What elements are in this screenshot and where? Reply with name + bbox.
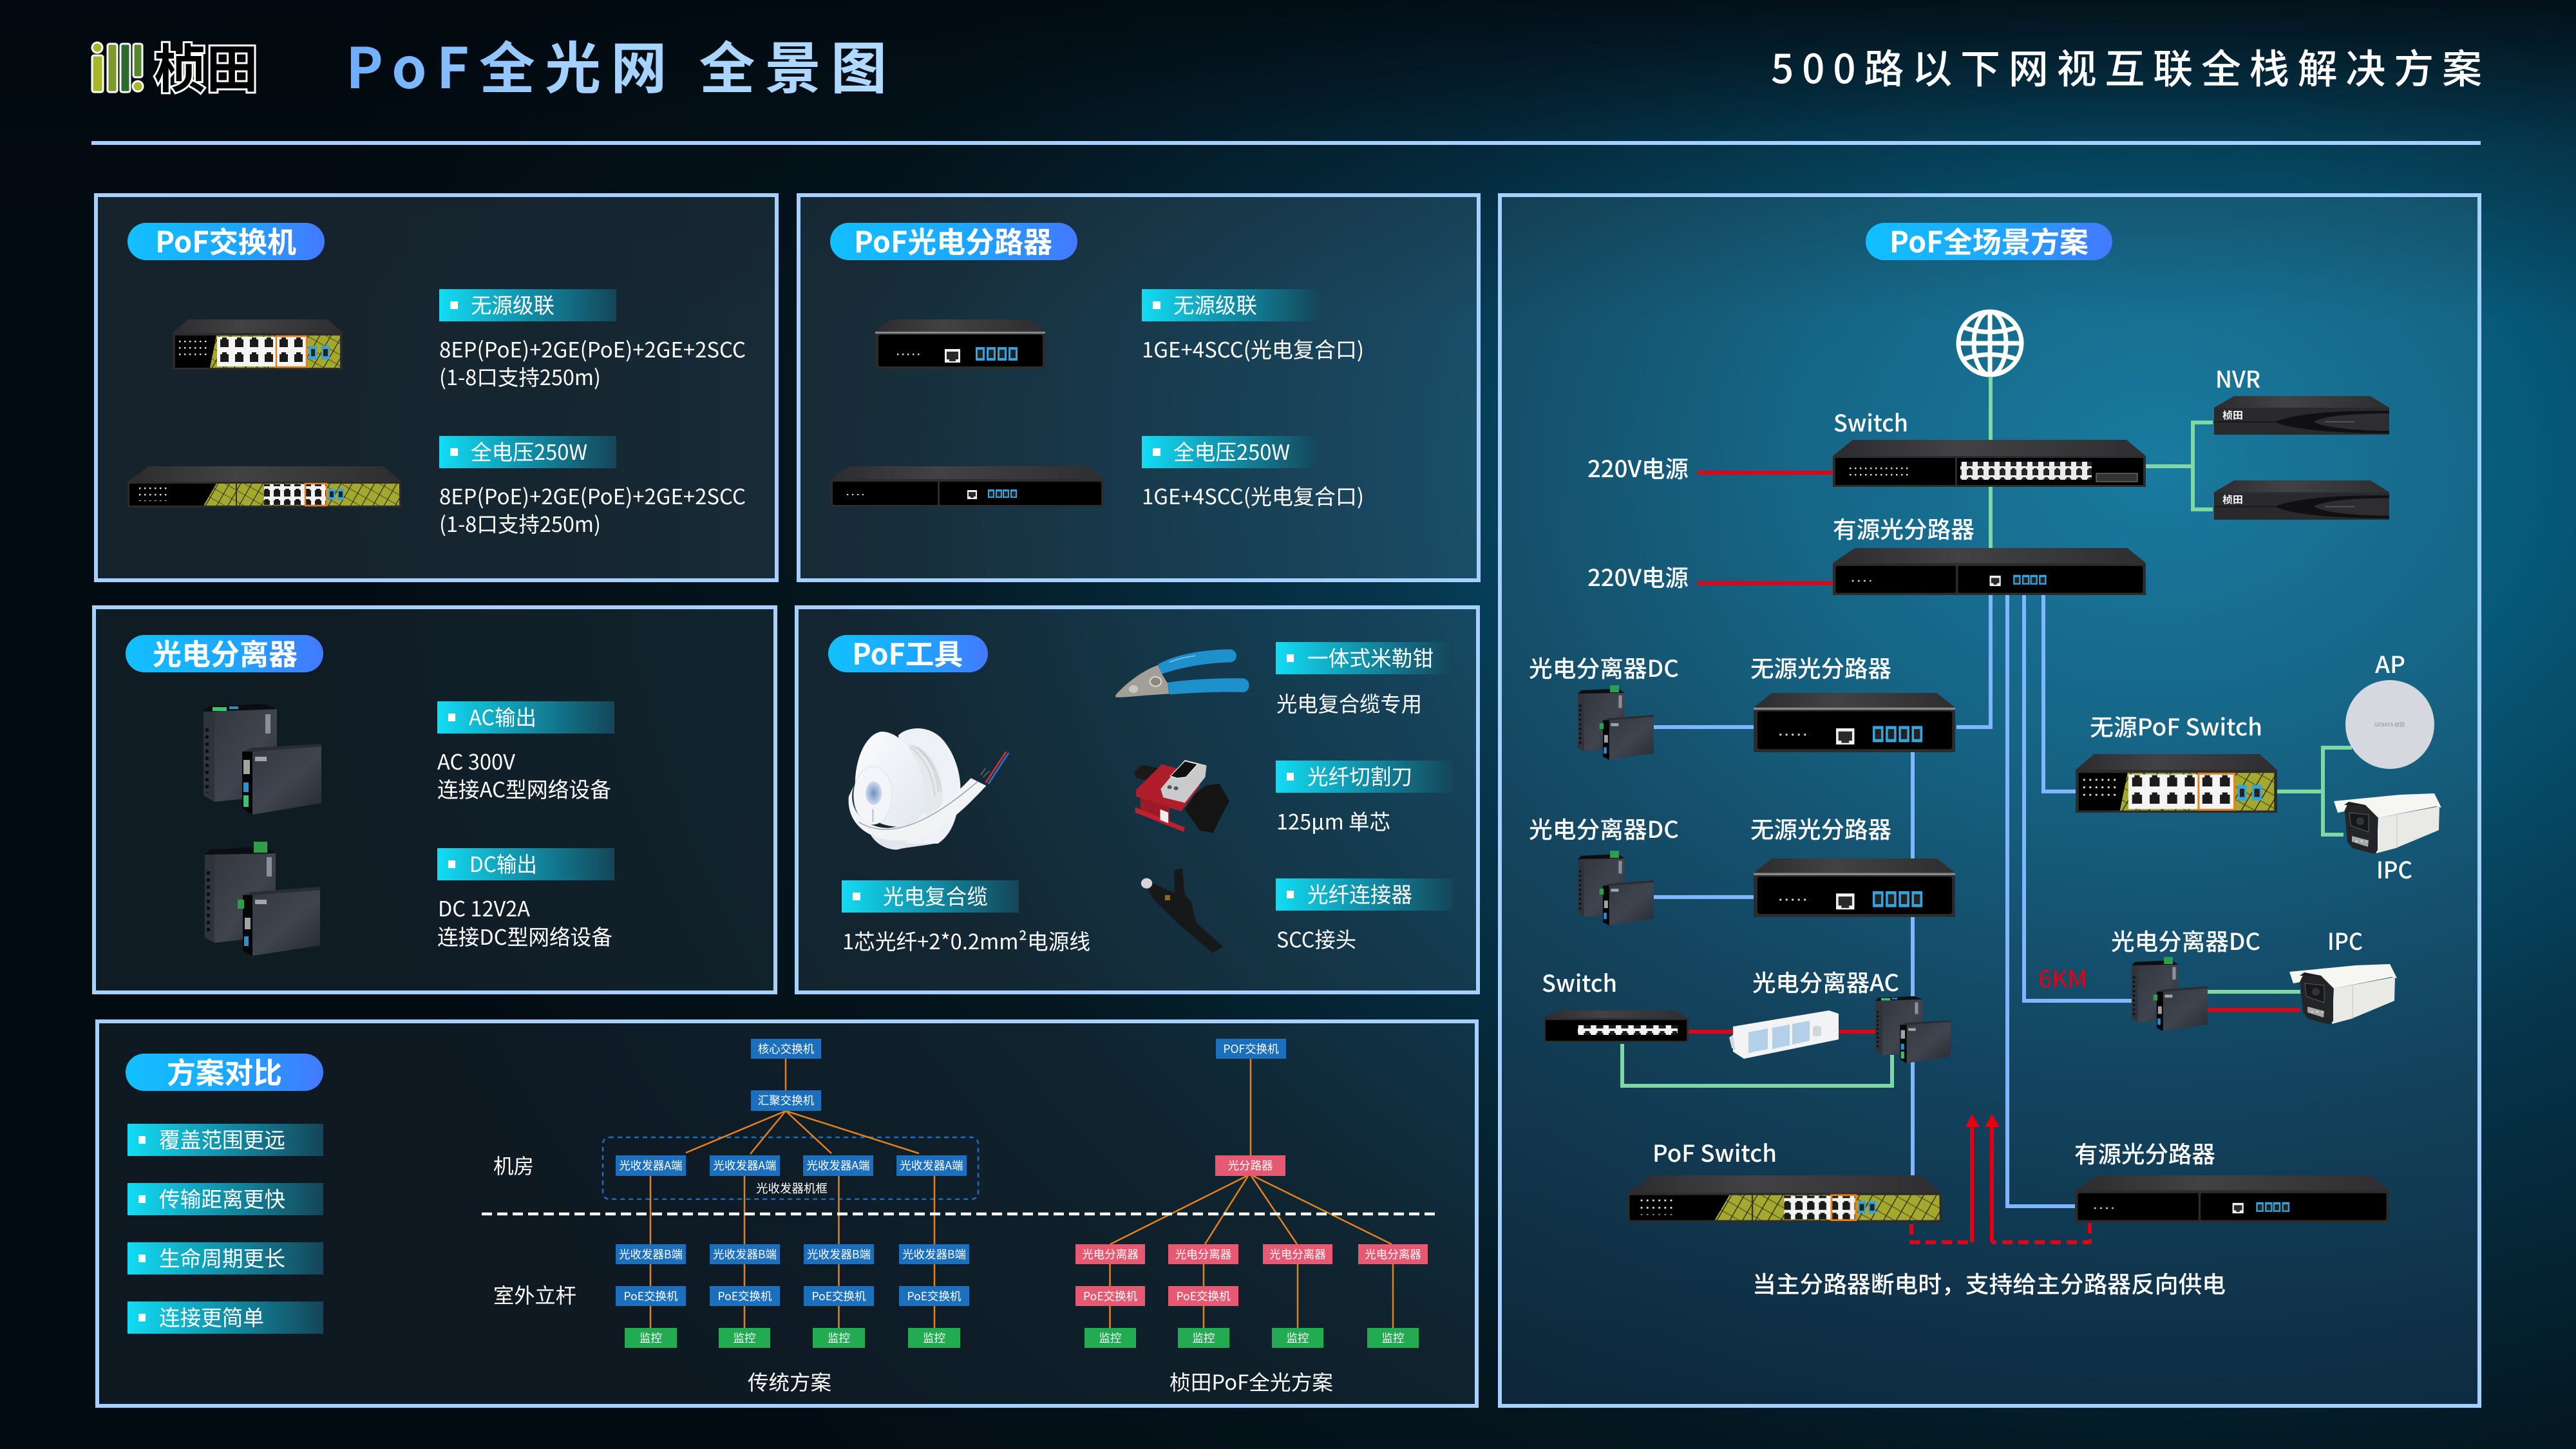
tag: 光电复合缆 (842, 880, 1019, 913)
row: separators (1075, 1244, 1428, 1264)
tag: 一体式米勒钳 (1276, 641, 1453, 674)
row: monitors (1084, 1328, 1419, 1348)
green data link (1622, 1044, 1892, 1086)
label: Switch: Switch (1833, 405, 1908, 439)
box: 核心交换机: 核心交换机 (758, 1041, 815, 1057)
logo: Zhentian: 桢田 (154, 28, 258, 103)
box: 核心交换机 (751, 1039, 821, 1059)
label: 无源PoF Switch: 无源PoF Switch (2090, 709, 2262, 743)
logo: Zhentian (92, 28, 258, 103)
device: DC separator (2132, 957, 2208, 1031)
spec text: SCC接头 (1276, 923, 1356, 954)
box: 光分路器 (1215, 1155, 1285, 1176)
device: passive PoF switch (2076, 754, 2277, 813)
red power link (2208, 1008, 2300, 1012)
row: transceiver B (616, 1244, 969, 1264)
label: 光收发器机框: 光收发器机框 (756, 1180, 828, 1197)
panel: solution comparison (97, 1021, 1477, 1406)
tag: 光纤切割刀: 光纤切割刀 (1307, 760, 1412, 791)
device: main active splitter (1833, 548, 2146, 595)
row: monitors: 监控 (1382, 1330, 1404, 1346)
device: DC separator (1578, 685, 1654, 760)
header rule (91, 141, 2481, 145)
device: short PoF switch (173, 319, 343, 370)
tag: 光纤切割刀 (1276, 760, 1453, 793)
label: 220V电源: 220V电源 (1587, 560, 1689, 593)
heading: PoF工具: PoF工具 (852, 631, 963, 673)
device: AP (2345, 680, 2434, 769)
heading: 方案对比 (126, 1050, 323, 1092)
spec text (437, 745, 611, 804)
spec text: (1-8口支持250m) (439, 507, 601, 538)
tag: 全电压250W (1142, 435, 1319, 468)
icon: fibre cleaver (1135, 760, 1229, 833)
chart: traditional scheme (603, 1039, 978, 1348)
row: PoE switches: PoE交换机 (811, 1288, 866, 1304)
tag: 连接更简单 (128, 1301, 323, 1334)
row: PoE switches: PoE交换机 (907, 1288, 961, 1304)
links to camera (2208, 990, 2300, 994)
row: PoE switches: PoE交换机 (1176, 1288, 1231, 1304)
row: transceiver B: 光收发器B端 (619, 1246, 683, 1262)
device: long splitter (830, 466, 1104, 507)
tag: DC输出 (437, 848, 614, 880)
spec text: AC 300V (437, 745, 515, 776)
label: Switch: Switch (1542, 965, 1617, 999)
label: 有源光分路器: 有源光分路器 (2074, 1136, 2215, 1170)
tag: DC输出: DC输出 (469, 848, 537, 878)
label: 无源光分路器: 无源光分路器 (1750, 811, 1891, 845)
icon: fibre stripper pliers (1115, 649, 1249, 697)
panel: PoF full-scene solution (1500, 195, 2479, 1406)
row: monitors: 监控 (923, 1330, 945, 1346)
label: 室外立杆: 室外立杆 (493, 1280, 576, 1309)
tag: AC输出: AC输出 (469, 701, 536, 732)
row: separators: 光电分离器 (1082, 1246, 1139, 1262)
label: AP: AP (2375, 647, 2405, 680)
spec text: 125μm 单芯 (1276, 805, 1390, 836)
subtitle: 500路以下网视互联全栈解决方案 (1771, 37, 2482, 95)
row: separators: 光电分离器 (1269, 1246, 1326, 1262)
spec text (439, 480, 746, 538)
row: transceiver A: 光收发器A端 (900, 1157, 963, 1173)
tag: 全电压250W: 全电压250W (1173, 435, 1290, 466)
tag: 传输距离更快 (128, 1182, 323, 1215)
box: POF交换机: POF交换机 (1223, 1041, 1279, 1057)
spec text: (1-8口支持250m) (439, 361, 601, 392)
device: IPC camera (2289, 964, 2397, 1025)
device: NVR 1 (2214, 396, 2389, 435)
device: active splitter (2075, 1175, 2389, 1222)
heading: 光电分离器: 光电分离器 (153, 631, 298, 673)
tag: 光纤连接器: 光纤连接器 (1307, 878, 1412, 909)
row: PoE switches: PoE交换机 (717, 1288, 772, 1304)
box: 光分路器: 光分路器 (1227, 1157, 1273, 1173)
icon: globe (1958, 312, 2022, 375)
icon: fibre connector (1141, 868, 1223, 953)
row: PoE switches: PoE交换机 (623, 1288, 678, 1304)
label: PoF Switch: PoF Switch (1653, 1135, 1777, 1169)
tag: 一体式米勒钳: 一体式米勒钳 (1307, 641, 1434, 672)
green network links (1991, 377, 2213, 548)
label: 有源光分路器: 有源光分路器 (1833, 511, 1975, 545)
device: long PoF switch (128, 466, 401, 507)
tag: 无源级联: 无源级联 (471, 289, 554, 319)
tag: 覆盖范围更远: 覆盖范围更远 (159, 1123, 285, 1154)
device: NVR 1: 桢田 (2222, 408, 2243, 422)
icon: cable spool (849, 728, 1009, 849)
row: PoE switches (616, 1286, 969, 1306)
row: monitors: 监控 (1287, 1330, 1309, 1346)
device: passive splitter (1754, 858, 1955, 917)
box: 汇聚交换机: 汇聚交换机 (758, 1092, 815, 1108)
row: transceiver B: 光收发器B端 (713, 1246, 777, 1262)
spec text: 光电复合缆专用 (1276, 687, 1422, 718)
device: power strip (1729, 1010, 1839, 1059)
row: transceiver A (616, 1155, 967, 1176)
spec text: 1GE+4SCC(光电复合口) (1142, 333, 1364, 364)
panel: PoF tools (797, 607, 1478, 992)
red power links (1689, 1030, 1877, 1034)
arrow: reverse power right (1985, 1114, 2090, 1242)
panel: PoF switch (96, 195, 777, 580)
row: transceiver B: 光收发器B端 (807, 1246, 871, 1262)
row: monitors: 监控 (1193, 1330, 1215, 1346)
device: AP: GENATA 桢田 (2374, 721, 2405, 728)
label: 机房: 机房 (493, 1150, 534, 1180)
panel: optical-electric separator (94, 607, 775, 992)
device: passive splitter (1754, 693, 1955, 752)
tag: 无源级联: 无源级联 (1173, 289, 1257, 319)
spec text: 连接DC型网络设备 (437, 920, 612, 951)
row: monitors: 监控 (733, 1330, 756, 1346)
tag: 传输距离更快: 传输距离更快 (159, 1182, 285, 1213)
row: PoE switches: PoE交换机 (1083, 1288, 1138, 1304)
label: IPC: IPC (2327, 923, 2363, 957)
box: POF交换机 (1216, 1039, 1286, 1059)
row: transceiver A: 光收发器A端 (619, 1157, 683, 1173)
label: 光电分离器DC: 光电分离器DC (1529, 811, 1679, 845)
spec text: 1芯光纤+2*0.2mm²电源线 (842, 925, 1090, 956)
device: DC separator (205, 842, 320, 956)
spec text (437, 892, 612, 951)
tag: 覆盖范围更远 (128, 1123, 323, 1156)
heading: 方案对比: 方案对比 (167, 1050, 282, 1092)
tag: AC输出 (437, 701, 614, 734)
tag: 生命周期更长: 生命周期更长 (159, 1242, 285, 1273)
label: NVR: NVR (2215, 361, 2260, 395)
spec text: 8EP(PoE)+2GE(PoE)+2GE+2SCC (439, 333, 746, 364)
device: AC separator (204, 704, 321, 815)
heading: PoF交换机: PoF交换机 (155, 219, 296, 261)
device: IPC camera (2334, 793, 2441, 854)
device: AC separator (1875, 996, 1951, 1063)
label: 无源光分路器: 无源光分路器 (1750, 650, 1891, 684)
row: monitors: 监控 (828, 1330, 850, 1346)
device: NVR 2 (2214, 480, 2389, 520)
label: 传统方案: 传统方案 (748, 1367, 831, 1396)
tag: 光电复合缆: 光电复合缆 (883, 880, 988, 911)
device: PoF switch (1627, 1175, 1942, 1222)
device: mini switch (1544, 1010, 1689, 1042)
red power links (1698, 473, 1833, 583)
spec text: 连接AC型网络设备 (437, 773, 611, 804)
heading: PoF光电分路器: PoF光电分路器 (854, 219, 1052, 261)
tag: 全电压250W (439, 435, 616, 468)
label: 桢田PoF全光方案: 桢田PoF全光方案 (1170, 1367, 1333, 1396)
spec text: 8EP(PoE)+2GE(PoE)+2GE+2SCC (439, 480, 746, 511)
spec text: 1GE+4SCC(光电复合口) (1142, 480, 1364, 511)
tag: 光纤连接器 (1276, 878, 1453, 911)
tag: 无源级联 (1142, 289, 1319, 321)
spec text: DC 12V2A (438, 892, 530, 923)
device: short splitter (875, 319, 1045, 369)
label: 6KM: 6KM (2038, 961, 2087, 994)
row: monitors (625, 1328, 960, 1348)
label: 光电分离器DC: 光电分离器DC (1529, 650, 1679, 684)
row: transceiver A: 光收发器A端 (713, 1157, 777, 1173)
device: main switch (1833, 440, 2146, 487)
row: monitors: 监控 (639, 1330, 662, 1346)
row: transceiver A: 光收发器A端 (806, 1157, 870, 1173)
label: 光电分离器DC: 光电分离器DC (2111, 923, 2260, 957)
device: DC separator (1578, 851, 1654, 925)
tag: 无源级联 (439, 289, 616, 321)
arrow: reverse power left (1911, 1114, 1980, 1242)
row: monitors: 监控 (1099, 1330, 1122, 1346)
device: NVR 2: 桢田 (2222, 493, 2243, 506)
spec text (439, 333, 746, 392)
row: separators: 光电分离器 (1175, 1246, 1231, 1262)
label: IPC: IPC (2376, 852, 2412, 886)
label: 220V电源: 220V电源 (1587, 451, 1689, 484)
panel: PoF optical splitter (799, 195, 1479, 580)
row: separators: 光电分离器 (1365, 1246, 1421, 1262)
note: 当主分路器断电时，支持给主分路器反向供电 (1752, 1266, 2226, 1300)
heading: PoF工具 (828, 631, 988, 673)
heading: PoF全场景方案: PoF全场景方案 (1889, 219, 2088, 261)
room / outdoor divider (482, 1213, 1435, 1215)
tag: 生命周期更长 (128, 1242, 323, 1274)
row: PoE switches (1075, 1286, 1238, 1306)
row: transceiver B: 光收发器B端 (902, 1246, 966, 1262)
chart: Zhentian PoF scheme (1075, 1039, 1428, 1348)
tag: 全电压250W: 全电压250W (471, 435, 587, 466)
tag: 连接更简单: 连接更简单 (159, 1301, 264, 1332)
green PoE links (2277, 748, 2352, 835)
label: 光电分离器AC: 光电分离器AC (1752, 965, 1899, 998)
blue fibre links (1654, 595, 2132, 1206)
box: 汇聚交换机 (751, 1090, 821, 1111)
title: PoF全光网 全景图 (346, 24, 898, 105)
